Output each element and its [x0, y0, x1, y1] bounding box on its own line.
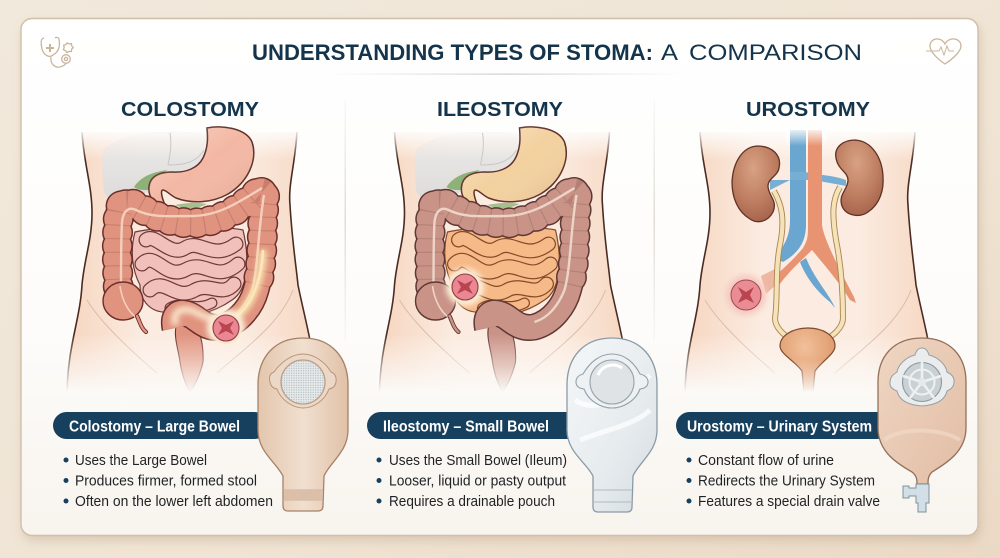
stoma conduit [761, 268, 779, 294]
bullet list: ileostomy: Uses the Small Bowel (Ileum) [389, 452, 567, 469]
icon: heart with pulse [926, 39, 961, 64]
bullet list: ileostomy: Looser, liquid or pasty output [389, 472, 567, 490]
bullet list: ileostomy [376, 452, 567, 510]
stoma: ileostomy [446, 268, 484, 306]
label pill: urostomy [676, 412, 891, 439]
bullet list: colostomy [64, 452, 273, 510]
vessels: blue vein [775, 130, 835, 308]
bullet list: urostomy: Constant flow of urine [698, 452, 834, 469]
torso outline [685, 132, 936, 392]
pouch: ileostomy [567, 338, 657, 512]
pouch: colostomy [258, 338, 348, 511]
pouch: urostomy [878, 338, 966, 512]
torso and digestive organs [67, 127, 318, 392]
panel: urostomy [676, 99, 966, 512]
bullet list: colostomy: Produces firmer, formed stool [75, 472, 257, 490]
label pill: urostomy: Urostomy – Urinary System [687, 418, 872, 436]
right kidney [836, 140, 883, 215]
right ureter [828, 187, 843, 338]
bullet list: urostomy: Features a special drain valve [698, 493, 880, 510]
title: UNDERSTANDING TYPES OF STOMA: [252, 40, 653, 65]
label pill: colostomy: Colostomy – Large Bowel [69, 418, 240, 436]
bullet list: colostomy: Often on the lower left abdomen [75, 493, 273, 510]
label pill: ileostomy [367, 412, 582, 439]
vessels: orange artery [770, 130, 856, 303]
bullet list: urostomy [686, 452, 880, 510]
stoma: colostomy [207, 309, 245, 347]
bullet list: ileostomy: Requires a drainable pouch [389, 493, 555, 510]
label pill: ileostomy: Ileostomy – Small Bowel [383, 418, 549, 436]
panel: colostomy [53, 99, 348, 511]
icon: stethoscope [41, 37, 73, 67]
title: A [661, 40, 678, 65]
left kidney [732, 146, 780, 222]
torso and digestive organs [380, 127, 630, 392]
stoma: urostomy [726, 275, 766, 315]
panel: ileostomy [367, 99, 657, 512]
drain valve [903, 484, 929, 512]
bullet list: colostomy: Uses the Large Bowel [75, 452, 207, 469]
vessels: renal veins [770, 172, 846, 190]
title [252, 40, 862, 65]
left ureter [774, 191, 790, 338]
heading: urostomy: UROSTOMY [746, 99, 871, 121]
bladder [780, 328, 835, 392]
urinary system [732, 128, 883, 392]
heading: ileostomy: ILEOSTOMY [437, 99, 564, 121]
bullet list: urostomy: Redirects the Urinary System [698, 472, 875, 490]
label pill: colostomy [53, 412, 268, 439]
title: COMPARISON [689, 40, 862, 65]
heading: colostomy: COLOSTOMY [121, 99, 260, 121]
